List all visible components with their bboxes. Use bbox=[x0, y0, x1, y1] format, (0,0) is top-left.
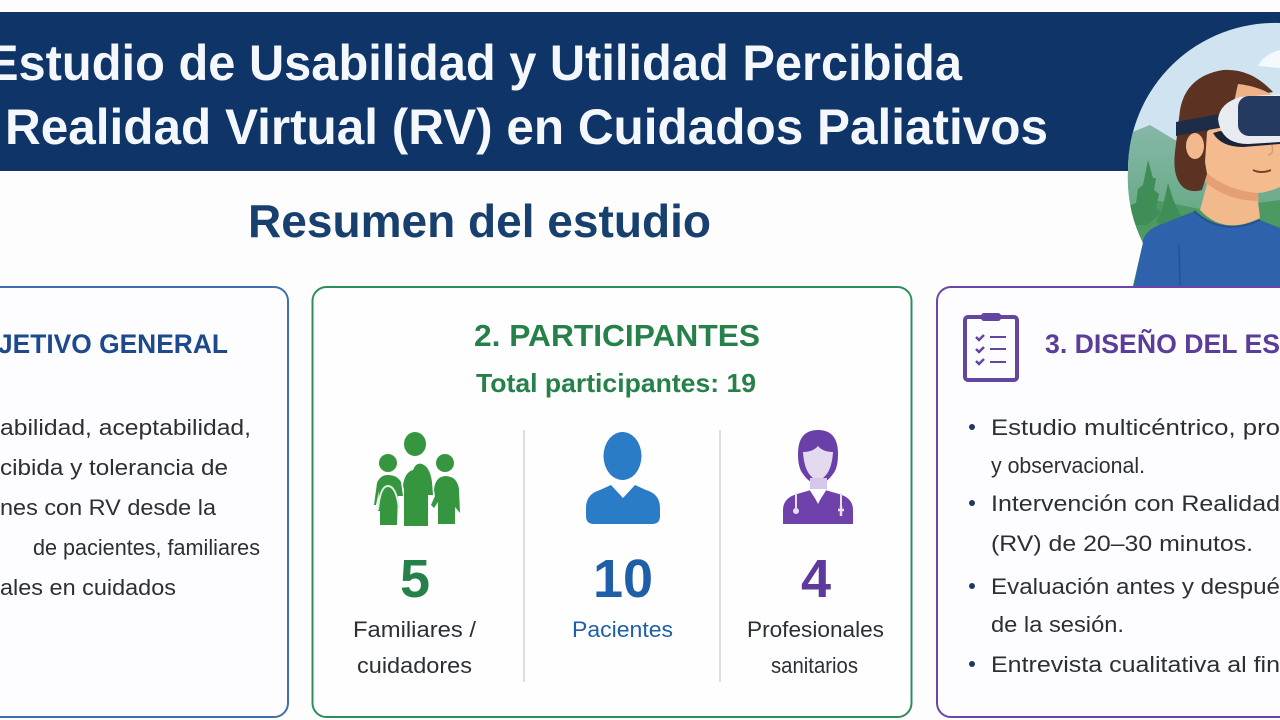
icon: patient bbox=[586, 432, 660, 524]
panel 1 heading: JETIVO GENERAL bbox=[0, 329, 228, 359]
panel 3 bullet list: de la sesión. bbox=[991, 612, 1124, 637]
panel 3 bullet list: y observacional. bbox=[991, 453, 1145, 478]
panel 3 bullet list: Intervención con Realidad bbox=[991, 491, 1280, 516]
stat: pacientes bbox=[572, 549, 673, 642]
total participants: Total participantes: 19 bbox=[476, 368, 756, 398]
stat: profesionales: Profesionales bbox=[747, 617, 884, 642]
panel 3 bullet list: Entrevista cualitativa al fin bbox=[991, 652, 1280, 677]
panel 3 bullet list: (RV) de 20–30 minutos. bbox=[991, 531, 1253, 556]
panel 1 body text bbox=[0, 415, 260, 600]
stat: profesionales: 4 bbox=[801, 549, 831, 609]
panel 1 body text: abilidad, aceptabilidad, bbox=[0, 415, 251, 440]
stat: pacientes: 10 bbox=[593, 549, 653, 609]
title: Realidad Virtual (RV) en Cuidados Paliativos bbox=[5, 99, 1048, 155]
panel: participantes bbox=[312, 287, 912, 717]
stat: pacientes: Pacientes bbox=[572, 617, 673, 642]
panel 1 body text: nes con RV desde la bbox=[0, 495, 217, 520]
panel: objetivo general bbox=[0, 287, 288, 717]
heading: Resumen del estudio bbox=[248, 195, 711, 247]
panel 1 body text: ales en cuidados bbox=[0, 575, 176, 600]
stat: familiares: 5 bbox=[400, 549, 430, 609]
panel 1 body text: cibida y tolerancia de bbox=[0, 455, 228, 480]
panel 3 heading: 3. DISEÑO DEL ES bbox=[1045, 328, 1280, 359]
stat: familiares: cuidadores bbox=[357, 653, 472, 678]
stat: profesionales: sanitarios bbox=[771, 653, 858, 678]
title: Estudio de Usabilidad y Utilidad Percibida bbox=[0, 35, 963, 91]
illustration: person with VR headset bbox=[1120, 20, 1280, 290]
panel 3 bullet list: Evaluación antes y despué bbox=[991, 574, 1280, 599]
title bbox=[0, 35, 1048, 155]
panel 2 heading: 2. PARTICIPANTES bbox=[474, 318, 760, 353]
panel 3 bullet list: Estudio multicéntrico, pro bbox=[991, 415, 1280, 440]
icon: health professional bbox=[783, 430, 853, 524]
stat: profesionales bbox=[747, 549, 884, 678]
panel 3 bullet list bbox=[969, 415, 1280, 677]
icon: clipboard checklist bbox=[965, 313, 1017, 380]
stat: familiares bbox=[353, 549, 477, 678]
banner bbox=[0, 12, 1280, 171]
stat: familiares: Familiares / bbox=[353, 617, 477, 642]
icon: family bbox=[374, 432, 460, 526]
panel: diseño del estudio bbox=[937, 287, 1280, 717]
panel 1 body text: de pacientes, familiares bbox=[33, 535, 260, 560]
